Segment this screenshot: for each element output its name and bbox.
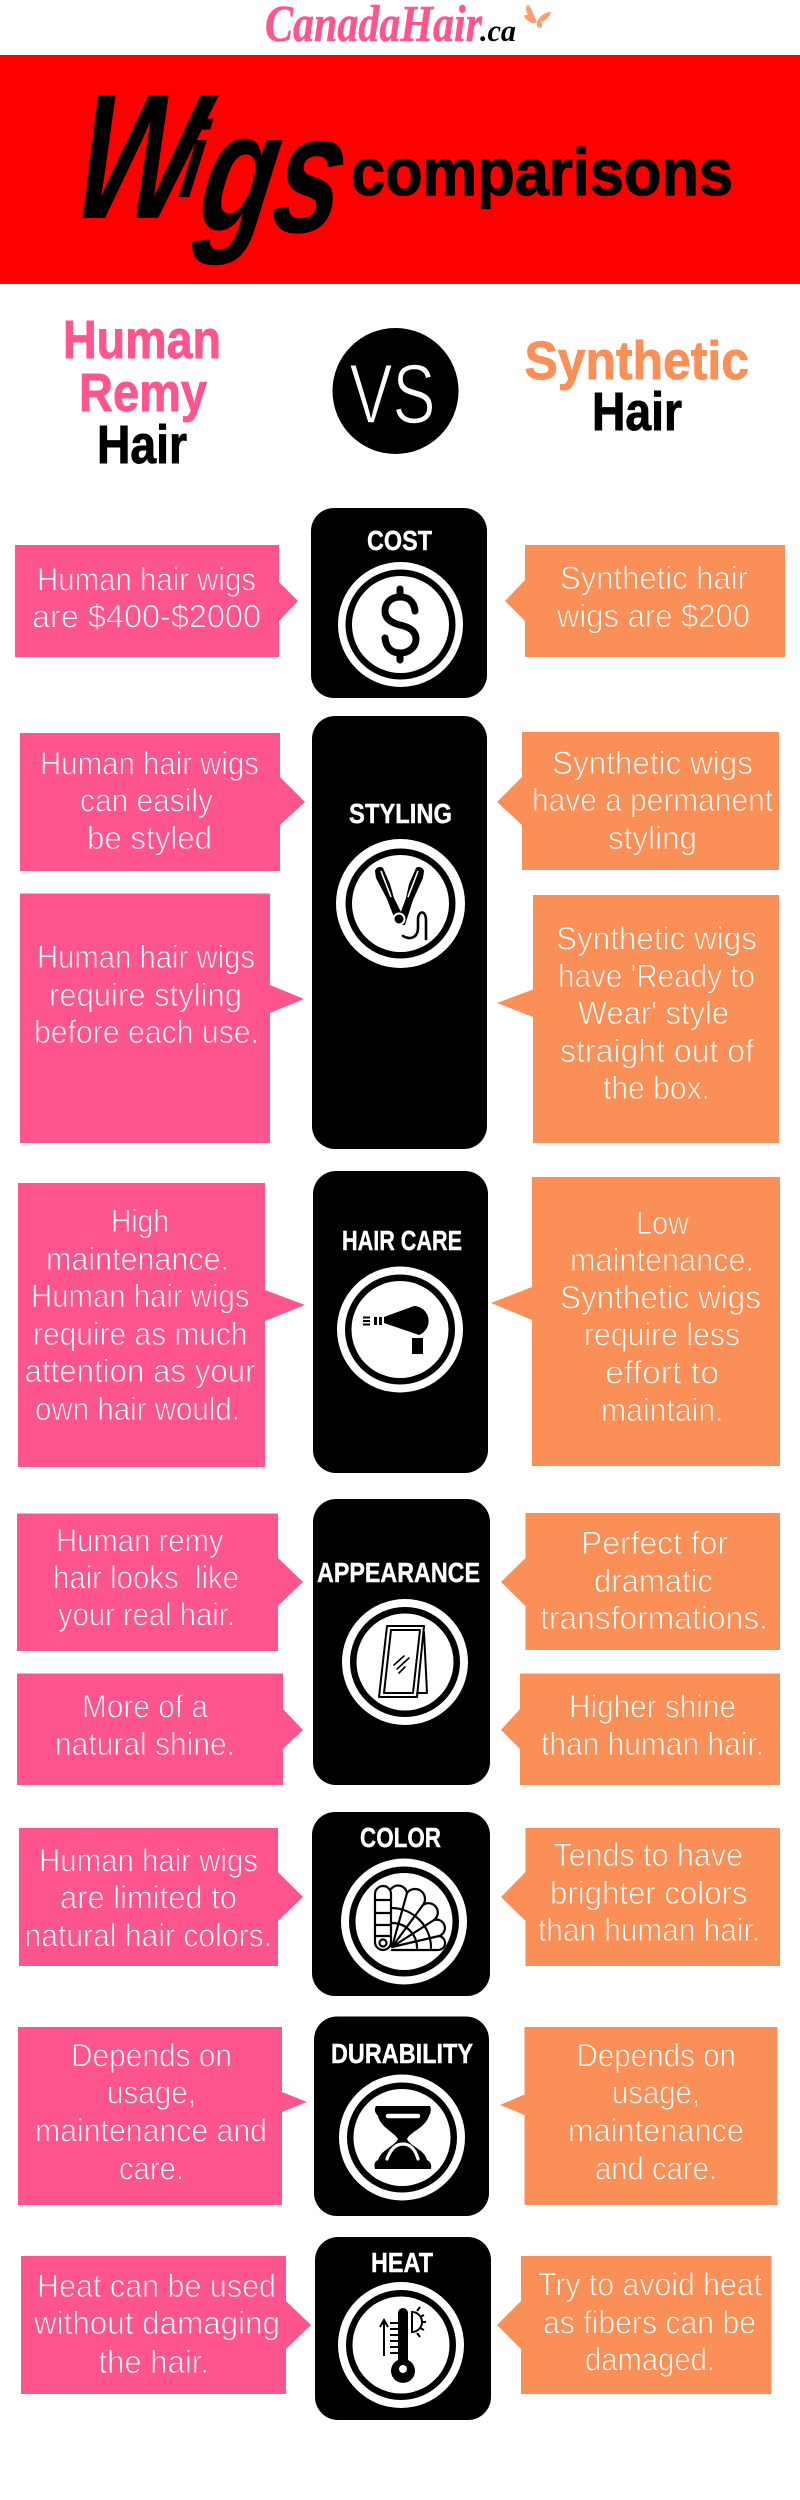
callout: human limited colors	[19, 1828, 303, 1966]
icon: standing mirror	[379, 1626, 427, 1697]
icon: dollar sign	[385, 589, 416, 660]
panel: styling	[20, 716, 779, 1149]
callout: human durability: Depends on	[71, 2038, 232, 2074]
title banner: i	[173, 100, 217, 221]
callout: synthetic low maintenance	[491, 1177, 780, 1466]
category card: cost: COST	[367, 525, 432, 556]
callout: human natural shine: More of a	[82, 1688, 208, 1724]
callout: human hair requires styling: require styling	[49, 977, 242, 1013]
heading: Human Remy Hair: Remy	[79, 363, 207, 423]
callout: synthetic low maintenance: Low	[636, 1205, 690, 1241]
VS badge	[332, 328, 458, 454]
callout: synthetic low maintenance: Synthetic wigs	[560, 1280, 761, 1316]
callout: human remy looks real: Human remy	[56, 1522, 224, 1558]
heading: Synthetic Hair: Synthetic	[524, 331, 749, 391]
callout: human hair maintenance: require as much	[33, 1316, 248, 1352]
callout: synthetic dramatic transformations: dramatic	[594, 1563, 713, 1599]
category card: durability	[314, 2016, 489, 2216]
panel: cost	[15, 508, 785, 698]
category card: hair care: HAIR CARE	[342, 1225, 462, 1256]
callout: synthetic hair cost	[505, 545, 785, 657]
callout: synthetic heat: damaged.	[585, 2342, 715, 2378]
callout: synthetic ready to wear: the box.	[603, 1070, 710, 1106]
heading: Human Remy Hair	[63, 310, 221, 475]
category card: styling: STYLING	[349, 798, 452, 829]
title banner	[0, 55, 800, 284]
callout: synthetic permanent styling: Synthetic wigs	[552, 745, 753, 781]
callout: synthetic durability: and care.	[595, 2150, 717, 2186]
icon: hourglass	[374, 2106, 431, 2169]
callout: synthetic ready to wear: Synthetic wigs	[556, 920, 757, 956]
callout: synthetic hair cost: Synthetic hair	[560, 560, 748, 596]
callout: human remy looks real: your real hair.	[58, 1596, 235, 1632]
callout: human limited colors: are limited to	[60, 1880, 237, 1916]
callout: synthetic low maintenance: effort to	[605, 1354, 719, 1390]
callout: synthetic durability: maintenance	[568, 2112, 744, 2148]
category card: durability: DURABILITY	[331, 2038, 473, 2069]
icon: flat iron	[375, 867, 426, 939]
callout: human hair cost: Human hair wigs	[37, 562, 256, 598]
callout: human remy looks real: hair looks like	[53, 1560, 239, 1596]
panel: heat	[21, 2237, 772, 2420]
icon: colour swatch fan	[375, 1885, 445, 1950]
heading: Human Remy Hair: Hair	[97, 415, 187, 475]
callout: synthetic brighter colors: than human hair.	[538, 1912, 760, 1948]
category card: cost	[311, 508, 487, 698]
callout: synthetic dramatic transformations: Perfect for	[581, 1525, 728, 1561]
callout: human heat: the hair.	[98, 2344, 209, 2380]
callout: human durability: care.	[119, 2150, 184, 2186]
callout: synthetic low maintenance: require less	[584, 1316, 740, 1352]
callout: synthetic ready to wear	[497, 895, 779, 1143]
callout: synthetic brighter colors: brighter colors	[550, 1875, 748, 1911]
callout: human durability: usage,	[107, 2074, 196, 2110]
callout: synthetic heat	[497, 2256, 772, 2394]
VS badge: VS	[350, 347, 436, 441]
category card: hair care	[313, 1171, 488, 1473]
callout: synthetic permanent styling	[497, 732, 779, 870]
callout: synthetic dramatic transformations	[501, 1513, 780, 1650]
panel: hair care	[18, 1171, 780, 1473]
callout: human hair maintenance: Human hair wigs	[31, 1278, 250, 1314]
callout: human limited colors: natural hair colors.	[24, 1918, 272, 1954]
callout: synthetic brighter colors	[501, 1828, 780, 1966]
callout: human hair maintenance: High	[111, 1203, 169, 1239]
category card: color: COLOR	[360, 1822, 441, 1853]
callout: human hair maintenance: own hair would.	[35, 1391, 240, 1427]
panel: color	[19, 1812, 780, 1996]
callout: human hair requires styling: before each use.	[34, 1014, 259, 1050]
category card: appearance	[313, 1499, 490, 1785]
callout: synthetic permanent styling: styling	[608, 820, 697, 856]
callout: synthetic ready to wear: Wear' style	[578, 995, 729, 1031]
category card: styling	[312, 716, 487, 1149]
callout: human heat	[21, 2256, 311, 2394]
title banner: g	[188, 77, 296, 266]
callout: human hair easily styled: can easily	[80, 782, 213, 818]
category card: color	[312, 1812, 490, 1996]
callout: synthetic hair cost: wigs are $200	[556, 598, 750, 634]
heading: Human Remy Hair: Human	[63, 310, 221, 370]
callout: human hair maintenance: maintenance.	[46, 1241, 229, 1277]
callout: human hair cost: are $400-$2000	[32, 598, 261, 634]
callout: human remy looks real	[17, 1514, 303, 1651]
callout: synthetic low maintenance: maintenance.	[570, 1242, 754, 1278]
title banner: comparisons	[351, 135, 733, 209]
callout: synthetic ready to wear: straight out of	[560, 1033, 754, 1069]
title banner: s	[262, 79, 362, 268]
callout: synthetic higher shine	[501, 1674, 780, 1785]
callout: human hair maintenance: attention as your	[24, 1353, 256, 1389]
callout: human hair requires styling	[20, 894, 304, 1143]
callout: synthetic ready to wear: have 'Ready to	[558, 958, 755, 994]
callout: human hair easily styled: Human hair wigs	[40, 746, 259, 782]
callout: human heat: without damaging	[33, 2305, 280, 2341]
callout: synthetic durability: Depends on	[576, 2038, 736, 2074]
callout: synthetic durability: usage,	[612, 2074, 700, 2110]
heading: Synthetic Hair	[524, 331, 749, 442]
callout: human limited colors: Human hair wigs	[39, 1842, 258, 1878]
category card: heat: HEAT	[371, 2247, 433, 2278]
callout: synthetic heat: Try to avoid heat	[538, 2266, 762, 2302]
panel: appearance	[17, 1499, 780, 1785]
callout: human hair easily styled: be styled	[87, 820, 212, 856]
callout: synthetic heat: as fibers can be	[543, 2304, 756, 2340]
icon: hair dryer	[363, 1306, 429, 1354]
panel: durability	[18, 2016, 778, 2216]
callout: human hair easily styled	[20, 733, 305, 871]
callout: synthetic permanent styling: have a permanent	[532, 782, 773, 818]
callout: human hair requires styling: Human hair wigs	[37, 939, 255, 975]
callout: synthetic higher shine: Higher shine	[569, 1688, 736, 1724]
callout: human durability	[18, 2027, 307, 2205]
callout: human heat: Heat can be used	[37, 2268, 276, 2304]
icon: thermometer	[380, 2307, 426, 2383]
callout: human natural shine	[17, 1674, 303, 1785]
title banner: W	[61, 58, 225, 257]
callout: synthetic durability	[500, 2027, 778, 2205]
heading: Synthetic Hair: Hair	[592, 382, 682, 442]
category card: heat	[315, 2237, 491, 2420]
callout: synthetic higher shine: than human hair.	[541, 1726, 764, 1762]
callout: synthetic brighter colors: Tends to have	[554, 1837, 743, 1873]
callout: synthetic dramatic transformations: transformations.	[540, 1600, 768, 1636]
logo: CanadaHair.ca: .ca	[480, 13, 516, 48]
callout: human hair cost	[15, 545, 298, 657]
callout: human durability: maintenance and	[35, 2112, 267, 2148]
category card: appearance: APPEARANCE	[317, 1557, 480, 1588]
callout: synthetic low maintenance: maintain.	[601, 1392, 724, 1428]
callout: human hair maintenance	[18, 1183, 305, 1467]
callout: human natural shine: natural shine.	[55, 1726, 235, 1762]
